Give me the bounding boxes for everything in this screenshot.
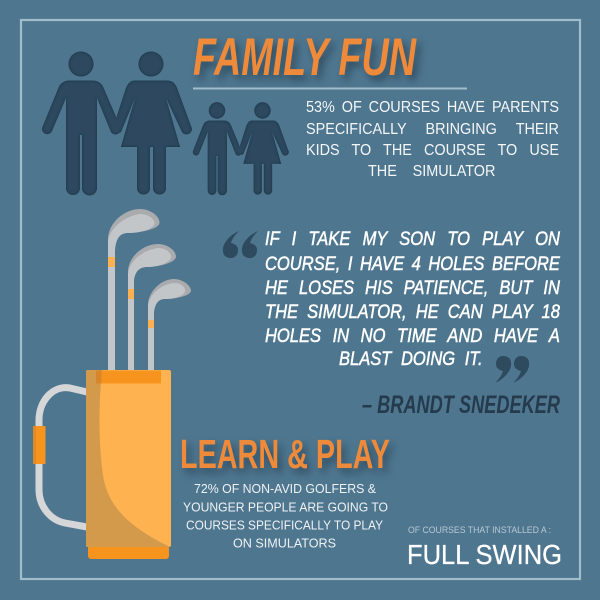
icon: closing quote mark (495, 356, 529, 383)
icon: girl figure (238, 102, 289, 195)
learn and play paragraph: ON SIMULATORS (233, 536, 336, 550)
icon: opening quote mark (223, 231, 258, 258)
bag base (88, 545, 169, 559)
icon: family of four figures (42, 52, 289, 196)
club 2 (128, 244, 176, 372)
family fun statistic text: KIDS TO THE COURSE TO USE (306, 142, 559, 159)
icon: golf clubs (108, 209, 191, 372)
handle grip (33, 426, 46, 464)
quote text (265, 229, 560, 370)
quote text: HOLES IN NO TIME AND HAVE A (265, 326, 560, 347)
club 3 (148, 279, 191, 372)
quote text: IF I TAKE MY SON TO PLAY ON (265, 229, 560, 250)
icon: boy figure (193, 102, 242, 195)
family fun statistic text: 53% OF COURSES HAVE PARENTS (306, 99, 559, 116)
icon: father figure (42, 52, 121, 196)
quote text: HE LOSES HIS PATIENCE, BUT IN (265, 278, 560, 299)
icon: golf bag (33, 370, 171, 559)
bag side shade (86, 370, 170, 547)
icon: mother figure (113, 52, 192, 195)
title underline (193, 88, 467, 90)
heading: Learn & Play: LEARN & PLAY (180, 431, 390, 477)
quote text: BLAST DOING IT. (339, 349, 483, 370)
title: Family Fun: FAMILY FUN (193, 28, 417, 87)
footer label: OF COURSES THAT INSTALLED A : (408, 525, 551, 535)
club 1 (108, 209, 160, 372)
family fun statistic text: THE SIMULATOR (368, 163, 495, 180)
learn and play paragraph (183, 481, 388, 550)
bag handle (39, 388, 87, 527)
learn and play paragraph: COURSES SPECIFICALLY TO PLAY (186, 518, 383, 532)
bag top band (96, 370, 161, 384)
bag body (86, 370, 171, 547)
learn and play paragraph: 72% OF NON-AVID GOLFERS & (194, 481, 376, 496)
family fun statistic text: SPECIFICALLY BRINGING THEIR (306, 121, 559, 138)
brand wordmark: Full Swing: FULL SWING (407, 539, 562, 570)
quote text: COURSE, I HAVE 4 HOLES BEFORE (265, 254, 560, 275)
learn and play paragraph: YOUNGER PEOPLE ARE GOING TO (183, 500, 388, 514)
quote text: THE SIMULATOR, HE CAN PLAY 18 (265, 302, 560, 323)
family fun statistic text (306, 99, 559, 180)
